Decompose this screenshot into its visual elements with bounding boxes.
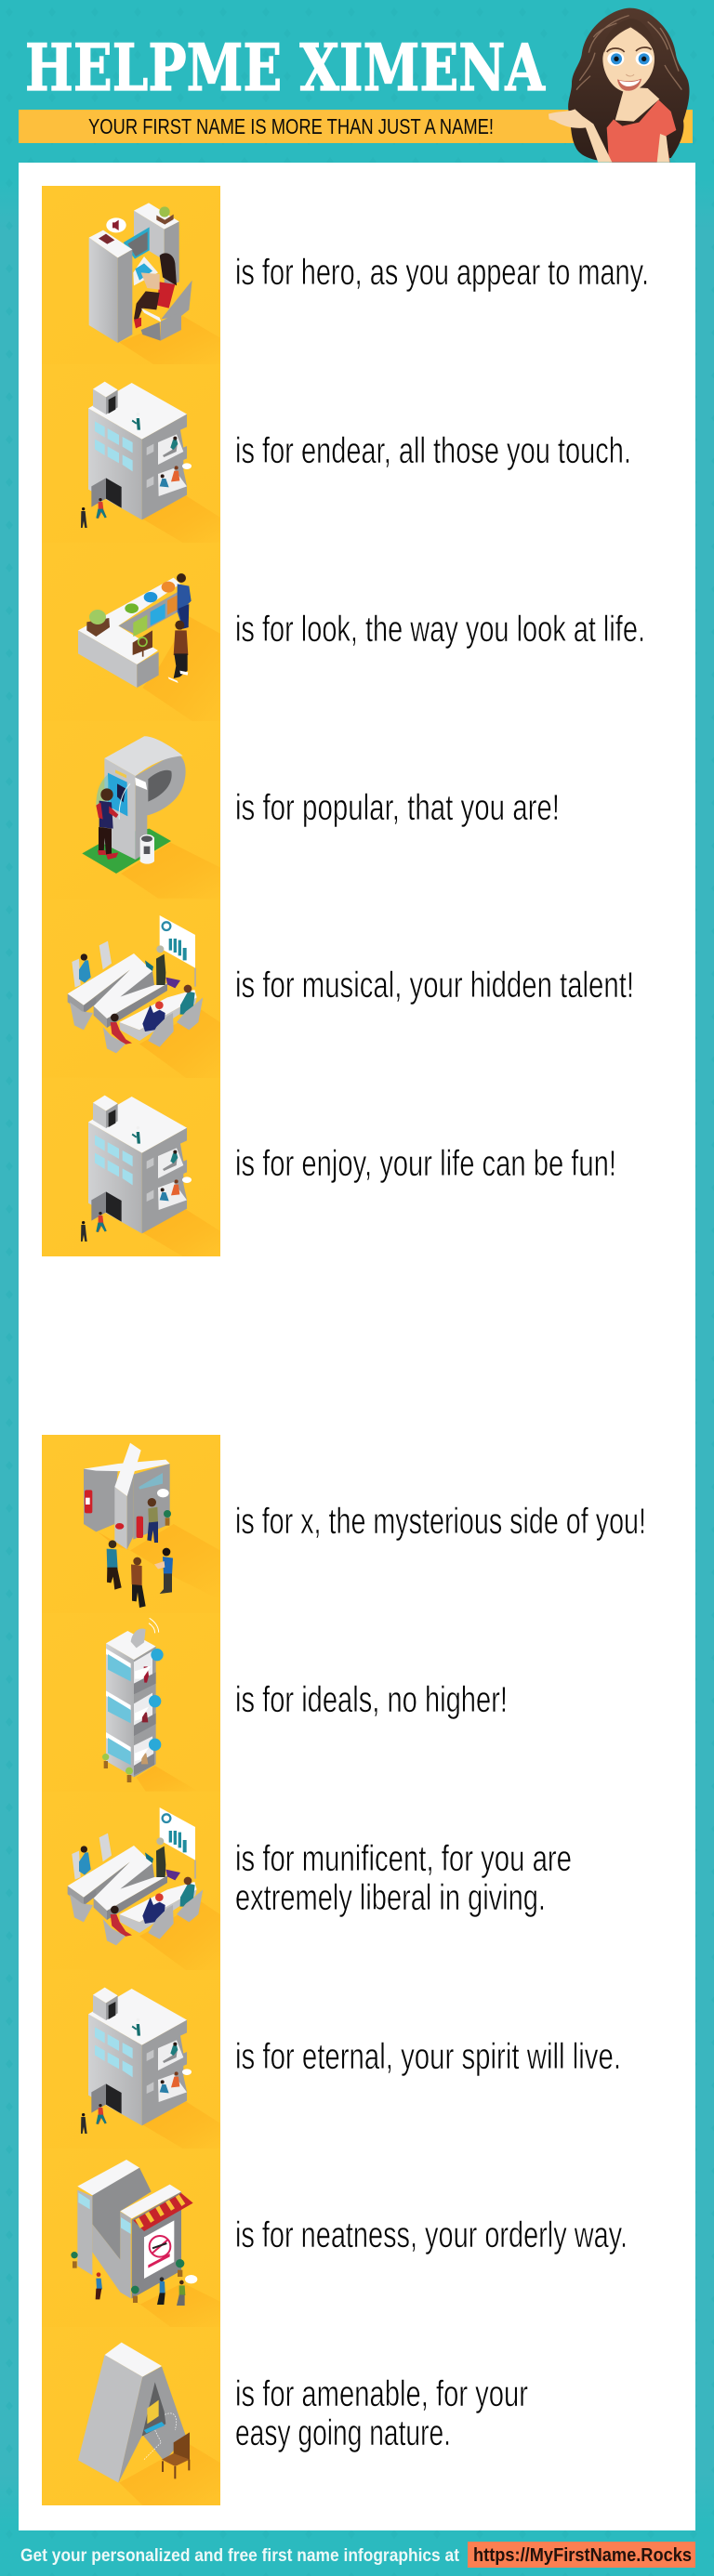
icon: letter X with extinguishers <box>42 1435 220 1613</box>
icon: letter L recycling bins <box>42 543 220 721</box>
icon: letter E building <box>42 1078 220 1256</box>
row: I <box>42 1613 508 1792</box>
row: M musical <box>42 900 634 1078</box>
icon: letter A with chair <box>42 2327 220 2505</box>
row: A <box>42 2327 528 2505</box>
icon: letter M meeting table <box>42 900 220 1078</box>
row: X <box>42 1435 646 1613</box>
character: woman presenting <box>549 8 690 163</box>
text: munificent: is for munificent, for you are <box>235 1839 572 1879</box>
row: E eternal <box>42 1970 621 2149</box>
icon: letter N with no smoking sign <box>42 2149 220 2327</box>
text: popular: is for popular, that you are! <box>235 788 560 828</box>
icon: letter M meeting table <box>42 1792 220 1970</box>
icon: letter H desk <box>42 186 220 364</box>
title: HELPME XIMENA <box>25 31 546 106</box>
text: amenable line two: easy going nature. <box>235 2413 451 2453</box>
row: H <box>42 186 649 364</box>
icon: letter E building <box>42 1970 220 2149</box>
icon: letter P cash machine <box>42 721 220 900</box>
subtitle banner <box>19 110 693 143</box>
subtitle banner: YOUR FIRST NAME IS MORE THAN JUST A NAME! <box>88 114 494 138</box>
row: E endear <box>42 364 631 543</box>
row: E enjoy <box>42 1078 616 1256</box>
text: munificent line two: extremely liberal in giving. <box>235 1878 546 1918</box>
footer url badge: https://MyFirstName.Rocks <box>473 2545 692 2566</box>
row: N <box>42 2149 628 2327</box>
icon: letter E building <box>42 364 220 543</box>
text: amenable: is for amenable, for your <box>235 2374 528 2414</box>
row: P <box>42 721 560 900</box>
row: M munificent <box>42 1792 572 1970</box>
text: ideals: is for ideals, no higher! <box>235 1680 508 1720</box>
row: L <box>42 543 645 721</box>
footer text: Get your personalized and free first name infographics at <box>20 2546 460 2566</box>
icon: letter I tower <box>42 1613 220 1792</box>
